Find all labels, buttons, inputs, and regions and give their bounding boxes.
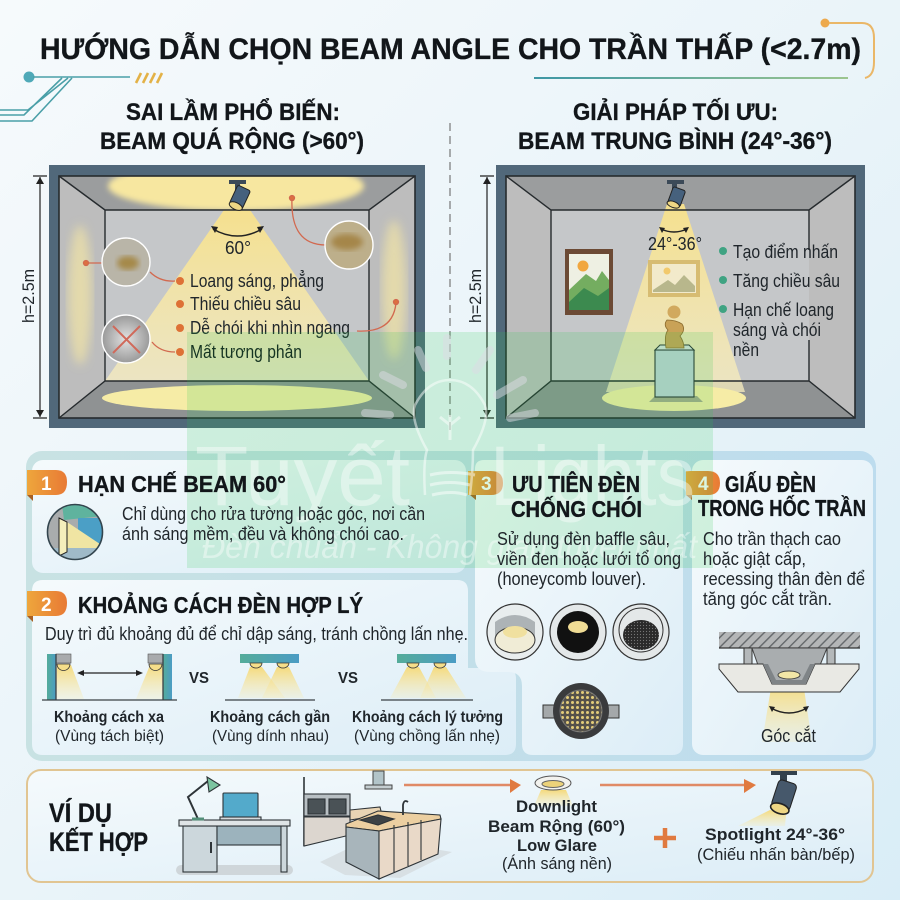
tip 4 text: hoặc giật cấp, — [703, 549, 806, 569]
badge 1 — [27, 470, 67, 501]
captions: Khoảng cách lý tưởng — [352, 709, 503, 726]
panel: tip 1 — [32, 460, 466, 573]
label 24-36 degrees: 24°-36° — [648, 234, 702, 254]
arrow — [600, 779, 756, 793]
tip 3 text: (honeycomb louver). — [497, 569, 646, 589]
panel: wide beam room — [49, 161, 425, 428]
tip 1 text: ánh sáng mềm, đều và không chói cao. — [122, 524, 404, 544]
watermark: Tuyết Lights — [187, 332, 713, 568]
height dimension left: h=2.5m — [19, 269, 38, 323]
icon: range hood — [365, 771, 392, 789]
framed painting — [565, 249, 613, 315]
heading: optimal solution: BEAM TRUNG BÌNH (24°-36°) — [518, 127, 832, 155]
tip 1 text — [122, 504, 425, 544]
diagram: ideal spacing — [381, 654, 473, 700]
badge 2 — [27, 591, 67, 622]
tip 2 text: Duy trì đủ khoảng đủ để chỉ dập sáng, tránh chồng lấn nhẹ. — [45, 624, 468, 644]
diagram: close spacing — [225, 654, 315, 700]
tip 1 content — [27, 470, 425, 562]
tip 1 text: Chỉ dùng cho rửa tường hoặc góc, nơi cần — [122, 504, 425, 524]
badge 2: 2 — [41, 595, 52, 616]
icon: downlight — [534, 776, 573, 806]
list: benefits: Tăng chiều sâu — [733, 271, 840, 291]
watermark bulb icon — [365, 338, 535, 495]
heading: optimal solution: GIẢI PHÁP TỐI ƯU: — [573, 97, 778, 126]
tip 3 heading: ƯU TIÊN ĐÈN — [512, 470, 640, 497]
list: benefits: nền — [733, 340, 759, 360]
icon: wall wash — [48, 505, 102, 559]
list: benefits: Hạn chế loang — [733, 300, 834, 320]
icon: black trim — [550, 604, 606, 660]
example heading: VÍ DỤ — [49, 797, 112, 828]
tip 4 heading — [698, 470, 866, 521]
captions: Khoảng cách xa — [54, 709, 164, 726]
spotlight text: (Chiếu nhấn bàn/bếp) — [697, 845, 855, 864]
captions: (Vùng dính nhau) — [212, 728, 329, 745]
downlight text: Low Glare — [517, 836, 597, 855]
tip 3 content — [487, 470, 681, 739]
tip 4 heading: GIẤU ĐÈN — [725, 470, 816, 497]
magnifier: washed-out spot left — [102, 238, 150, 286]
watermark brand text: Tuyết — [195, 429, 410, 523]
badge 4: 4 — [698, 474, 709, 495]
vs label: VS — [338, 670, 358, 687]
captions: (Vùng chồng lấn nhẹ) — [354, 728, 500, 745]
height dimension right: h=2.5m — [466, 269, 485, 323]
lit painting — [648, 260, 700, 297]
label: cut angle: Góc cắt — [761, 725, 816, 746]
panel: medium beam room — [496, 165, 865, 428]
heading: optimal solution — [518, 97, 832, 155]
spotlight text — [697, 825, 855, 864]
icon: honeycomb mesh — [613, 604, 669, 660]
list: problems: Thiếu chiều sâu — [190, 294, 301, 314]
icon: spotlight — [666, 180, 686, 210]
icon: desk with lamp and laptop — [176, 777, 293, 875]
diagram: recessed light in ceiling — [719, 632, 860, 742]
list: benefits: sáng và chói — [733, 320, 821, 340]
list: problems — [176, 270, 350, 362]
height dimension right — [466, 176, 494, 418]
tip 3 text: viền đen hoặc lưới tổ ong — [497, 549, 681, 569]
decoration: right orange bracket — [820, 18, 874, 78]
magnifier: lost contrast cross — [102, 315, 150, 363]
tip 2 content — [27, 590, 503, 745]
divider — [449, 123, 451, 432]
downlight text: (Ánh sáng nền) — [502, 854, 612, 873]
tip 4 content — [698, 470, 866, 746]
tip 2 heading: KHOẢNG CÁCH ĐÈN HỢP LÝ — [78, 590, 363, 618]
captions: Khoảng cách gần — [210, 709, 330, 726]
watermark: Tuyết Lights: Lights — [490, 429, 695, 523]
sculpture and pedestal — [649, 306, 703, 402]
plus sign — [654, 828, 676, 848]
list: benefits: Tạo điểm nhấn — [733, 242, 838, 262]
icon: kitchen island — [304, 777, 452, 879]
angle arc 60 — [211, 226, 264, 236]
example heading — [49, 797, 148, 857]
angle arc 24-36 — [659, 227, 689, 233]
magnifier: washed-out spot right — [325, 221, 373, 269]
tip 3 heading — [511, 470, 642, 522]
icon: deep baffle — [487, 604, 543, 660]
downlight text: Beam Rộng (60°) — [488, 817, 625, 836]
heading: common mistake: BEAM QUÁ RỘNG (>60°) — [100, 127, 364, 155]
heading: common mistake: SAI LẦM PHỔ BIẾN: — [126, 98, 340, 126]
watermark slogan: Đèn chuẩn - Không gian tuyệt nhất — [202, 528, 699, 565]
height dimension left — [19, 176, 47, 418]
list: benefits — [719, 242, 840, 360]
example heading: KẾT HỢP — [49, 826, 148, 857]
tip 3 text: Sử dụng đèn baffle sâu, — [497, 529, 670, 549]
downlight text — [488, 797, 625, 873]
floor light pool — [602, 385, 746, 411]
icon: spotlight — [738, 771, 797, 826]
badge 3 — [468, 471, 503, 500]
captions — [54, 709, 503, 745]
spotlight text: Spotlight 24°-36° — [705, 825, 845, 844]
list: problems: Dễ chói khi nhìn ngang — [190, 317, 350, 338]
decoration: left circuit trace — [0, 72, 162, 121]
tip 4 text: recessing thân đèn để — [703, 569, 865, 589]
decoration: title underline — [534, 77, 848, 79]
list: problems: Mất tương phản — [190, 342, 302, 362]
heading: common mistake — [100, 98, 364, 155]
label 60 degrees: 60° — [225, 238, 251, 258]
tip 4 text: Cho trần thạch cao — [703, 529, 841, 549]
badge 3: 3 — [481, 474, 492, 495]
floor light pool — [102, 385, 372, 411]
vs label: VS — [189, 670, 209, 687]
panel: tip 3 — [475, 460, 683, 755]
list: problems: Loang sáng, phẳng — [190, 270, 324, 291]
panel: tip 2 — [32, 580, 516, 755]
section backing: tips — [26, 451, 876, 761]
tip 4 text — [703, 529, 865, 609]
panel: combination example — [27, 770, 873, 882]
badge 1: 1 — [41, 474, 52, 495]
callouts: red leader lines — [84, 196, 398, 352]
tip 1 heading: HẠN CHẾ BEAM 60° — [78, 470, 286, 497]
tip 3 text — [497, 529, 681, 589]
badge 4 — [686, 471, 720, 500]
icon: track spotlight — [228, 180, 251, 212]
diagram: far spacing — [42, 654, 177, 700]
icon ring — [48, 504, 102, 560]
tip 4 text: tăng góc cắt trần. — [703, 588, 832, 609]
arrow — [404, 779, 521, 793]
icon: honeycomb louver downlight — [543, 683, 619, 739]
captions: (Vùng tách biệt) — [55, 728, 164, 745]
downlight text: Downlight — [516, 797, 597, 816]
panel: tip 4 — [692, 460, 873, 755]
title: HƯỚNG DẪN CHỌN BEAM ANGLE CHO TRẦN THẤP (<2.7m) — [40, 32, 861, 66]
tip 3 heading: CHỐNG CHÓI — [511, 495, 642, 522]
